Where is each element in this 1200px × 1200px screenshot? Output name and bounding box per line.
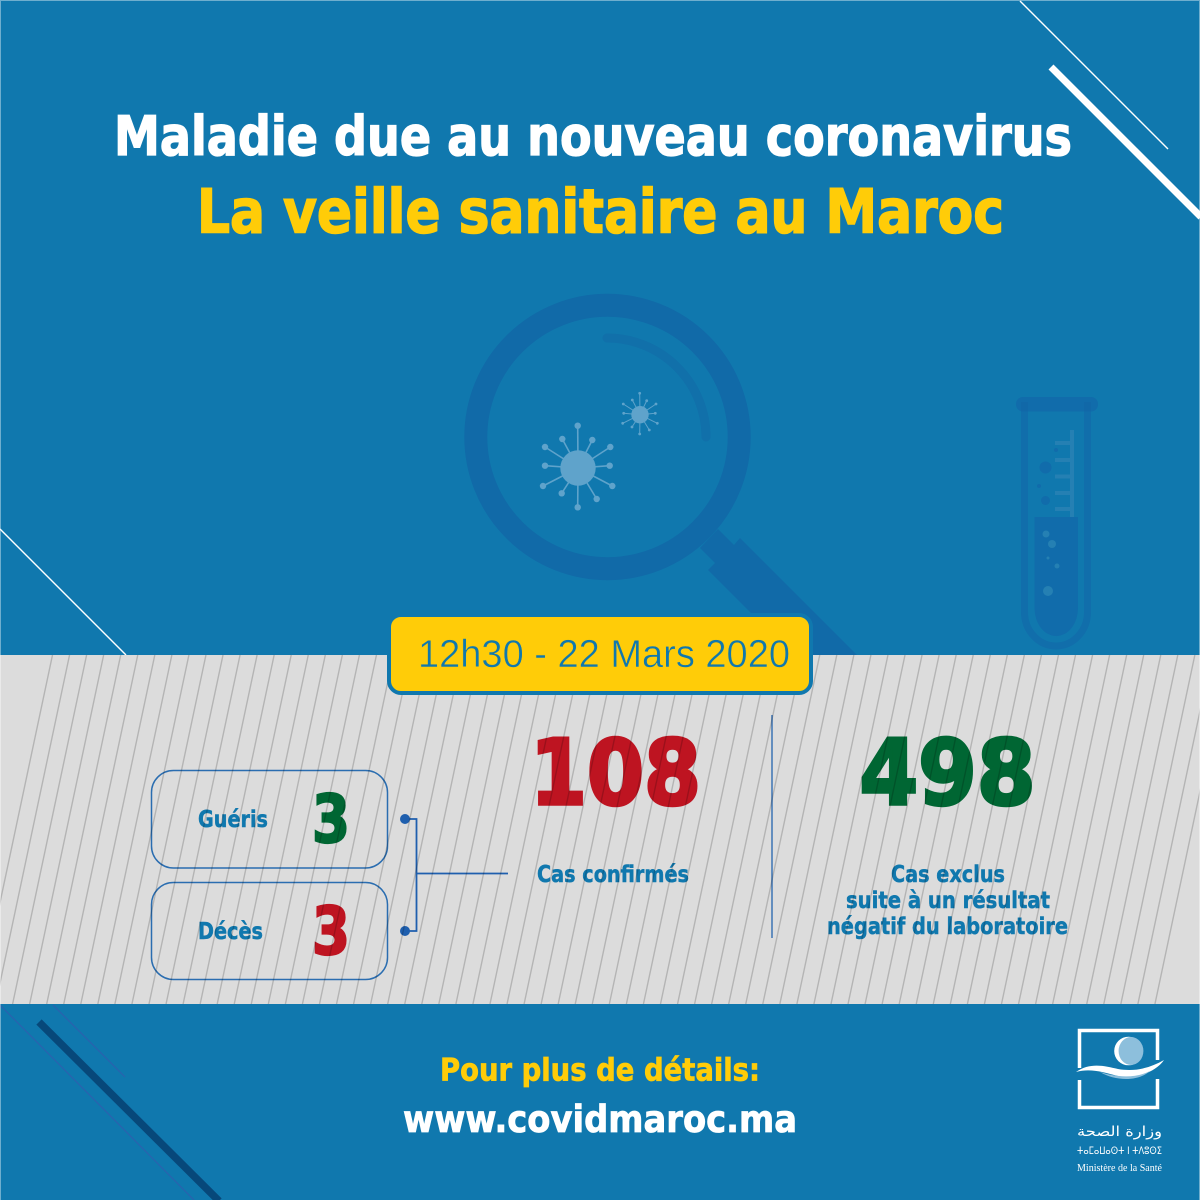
stat box: Guéris: [152, 770, 388, 868]
label: excluded cases: suite à un résultat: [846, 888, 1050, 914]
footer text: [403, 1052, 797, 1141]
decorative top-right diagonal lines: [1020, 1, 1200, 217]
icon: small virus: [621, 392, 659, 435]
number: 498: 498: [860, 721, 1036, 826]
decorative footer diagonal lines: [0, 1005, 219, 1200]
icon: magnifying glass: [476, 305, 857, 655]
number: deaths: 3: [312, 893, 350, 970]
website: www.covidmaroc.ma: [403, 1098, 797, 1141]
date badge: [389, 615, 811, 693]
icon: large virus: [540, 422, 616, 510]
title: [114, 105, 1072, 248]
connector bracket: [400, 814, 508, 936]
label: excluded cases: négatif du laboratoire: [827, 914, 1068, 940]
logo moon: [1114, 1037, 1143, 1065]
number: 108: 108: [530, 721, 701, 826]
logo arabic name: وزارة الصحة: [1077, 1124, 1162, 1140]
icon: test tube: [1016, 397, 1098, 646]
label: Cas confirmés: Cas confirmés: [537, 862, 689, 888]
number: recovered: 3: [312, 781, 350, 858]
footer background: [0, 1004, 1200, 1200]
stat box: Décès: [152, 882, 388, 980]
stat: confirmed cases: [530, 721, 701, 888]
logo wave: [1076, 1060, 1164, 1077]
logo tifinagh name: ⵜⴰⵎⴰⵡⴰⵙⵜ ⵏ ⵜⴷⵓⵙⵉ: [1077, 1146, 1162, 1157]
logo frame: [1080, 1030, 1158, 1108]
label: Décès: Décès: [198, 919, 263, 945]
date text: 12h30 - 22 Mars 2020: [418, 633, 790, 676]
grey hatched band: [0, 655, 1200, 1004]
title line 2: La veille sanitaire au Maroc: [197, 176, 1004, 248]
vertical divider: [771, 715, 773, 938]
label: excluded cases: Cas exclus: [891, 862, 1005, 888]
label: Guéris: Guéris: [198, 807, 268, 833]
logo french name: Ministère de la Santé: [1077, 1163, 1162, 1174]
logo: Ministère de la Santé: [1076, 1030, 1164, 1174]
footer prompt: Pour plus de détails:: [440, 1052, 760, 1088]
hatch lines: [0, 655, 1200, 1004]
stat: excluded cases: [827, 721, 1068, 940]
decorative left diagonal line: [0, 529, 126, 655]
label: excluded cases: [827, 862, 1068, 940]
